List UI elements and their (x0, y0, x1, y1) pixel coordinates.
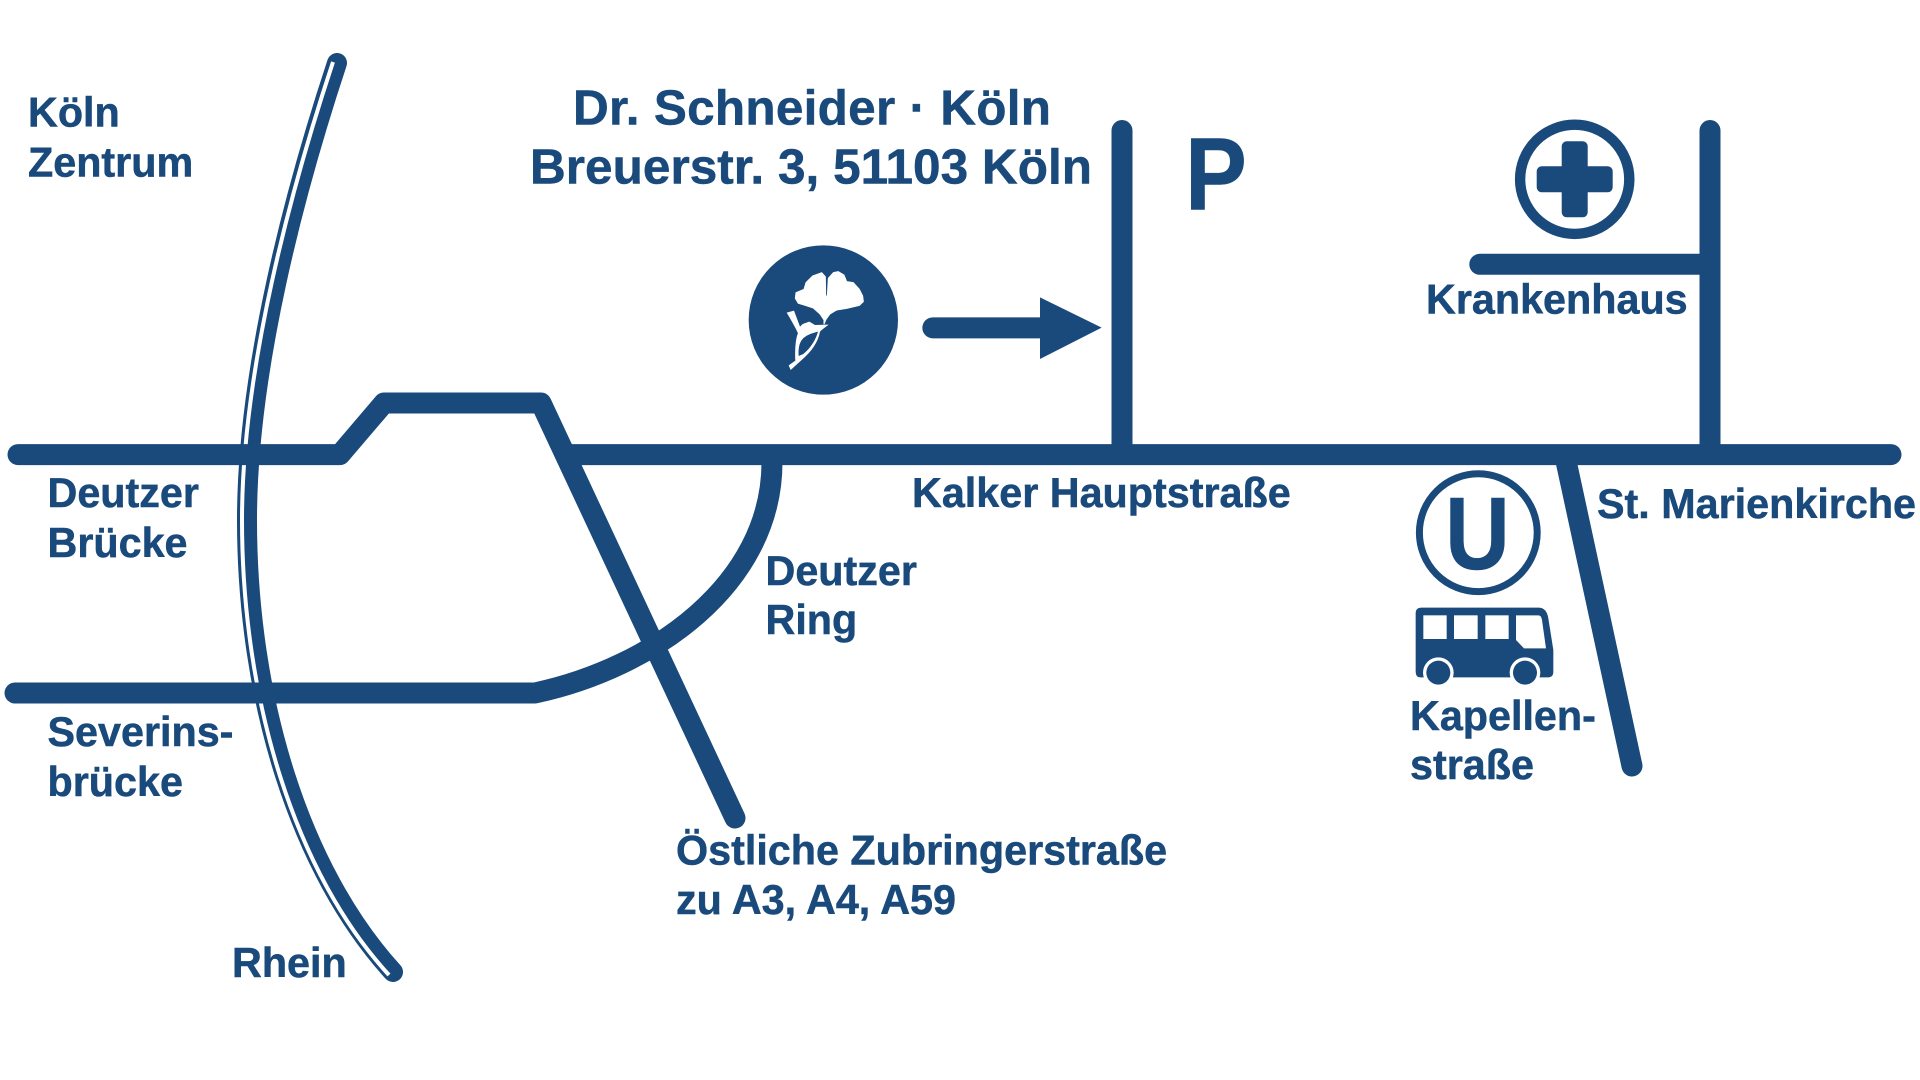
label: Deutzer Ring: Deutzer (766, 548, 917, 594)
label: Severins­brücke: Severins- (48, 709, 233, 755)
icon: U-Bahn: U (1445, 477, 1510, 591)
icon: bus (1416, 608, 1553, 688)
title: Breuerstr. 3, 51103 Köln (530, 140, 1092, 194)
icon: parking P: P (1185, 116, 1247, 231)
label: Deutzer Brücke: Brücke (48, 520, 188, 566)
road: hospital street with branch (1480, 130, 1710, 454)
label: Kalker Hauptstraße: Kalker Hauptstraße (912, 470, 1291, 516)
title: Dr. Schneider · Köln (573, 80, 1051, 136)
label: Deutzer Ring (766, 548, 917, 643)
label: Rhein: Rhein (232, 940, 347, 986)
arrow (922, 297, 1102, 359)
label: Severins­brücke (48, 709, 233, 805)
river: Rhein (242, 62, 393, 975)
label: Deutzer Brücke: Deutzer (48, 470, 199, 516)
icon: ginkgo leaf logo (749, 245, 898, 395)
road: Severinsbrücke and Deutzer Ring (15, 462, 772, 693)
label: Köln Zentrum: Zentrum (28, 140, 193, 186)
title (530, 80, 1092, 194)
label: Östliche Zubringerstraße (676, 828, 1167, 923)
label: Kapellenstraße (1410, 693, 1596, 788)
road: Deutzer Brücke to Östliche Zubringerstraße (18, 403, 735, 818)
label: Köln Zentrum: Köln (28, 90, 120, 136)
label: Deutzer Brücke (48, 470, 199, 566)
label: Kapellenstraße: straße (1410, 742, 1534, 788)
label: St. Marienkirche: St. Marienkirche (1597, 481, 1916, 527)
label: Krankenhaus: Krankenhaus (1426, 276, 1688, 322)
label: Köln Zentrum (28, 90, 193, 186)
road: parking side street (1112, 130, 1132, 454)
icon: U-Bahn (1419, 474, 1537, 592)
icon: hospital cross (1520, 125, 1629, 234)
label: Östliche Zubringerstraße: zu A3, A4, A59 (676, 877, 956, 923)
label: Östliche Zubringerstraße: Östliche Zubringerstraße (676, 828, 1167, 874)
label: Kapellenstraße: Kapellen- (1410, 693, 1596, 739)
road: Kalker Hauptstraße (570, 444, 1891, 465)
road: Kapellenstraße (1566, 461, 1632, 766)
label: Severins­brücke: brücke (48, 759, 183, 805)
label: Deutzer Ring: Ring (766, 597, 857, 643)
